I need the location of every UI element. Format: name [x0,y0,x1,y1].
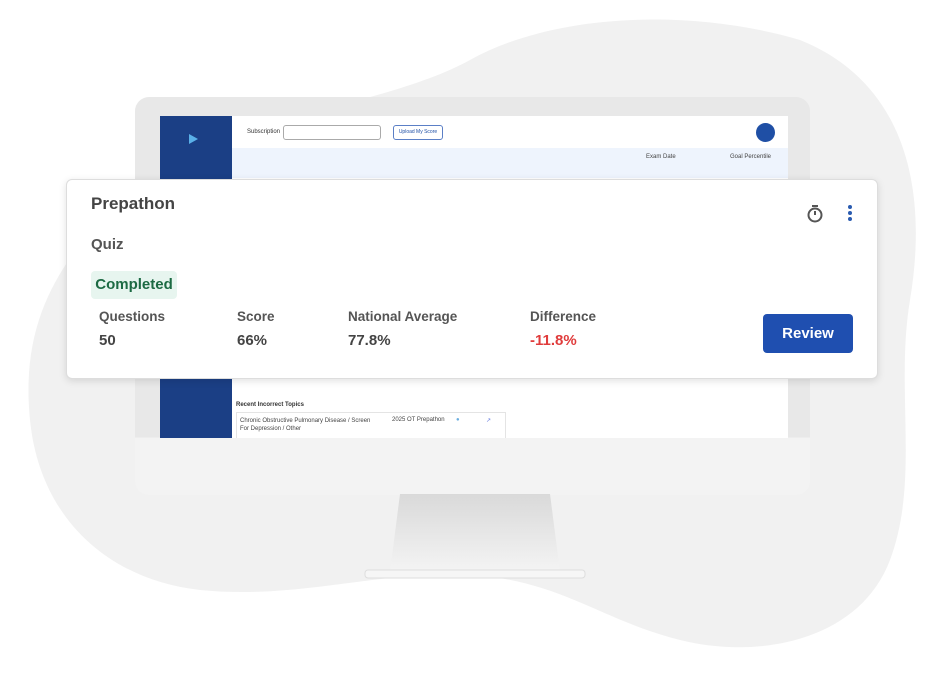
review button [763,314,853,353]
recent incorrect topics: ↗ [486,418,491,424]
card: Prepathon quiz [66,179,878,379]
header strip: Exam Date [646,154,676,160]
recent incorrect topics: 2025 OT Prepathon [392,417,445,423]
title: Prepathon [91,194,175,213]
stat: national average: National Average [348,309,457,324]
status badge: Completed [95,276,173,293]
stat: questions: Questions [99,309,165,324]
review button: Review [782,325,834,342]
stat: difference [530,309,596,349]
header strip [232,148,788,178]
subtitle: Quiz [91,236,124,253]
recent incorrect topics: ● [456,417,460,423]
icon: more menu [848,205,852,221]
sidebar [160,116,232,438]
stat: difference: Difference [530,309,596,324]
stat: score: 66% [237,332,267,349]
screen [160,116,788,438]
stat: national average: 77.8% [348,332,391,349]
recent incorrect topics: Chronic Obstructive Pulmonary Disease / Screen For Depression / Other [240,418,370,432]
stat: questions [99,309,165,349]
top bar [247,123,775,142]
monitor stand [364,494,586,578]
status badge [91,271,177,299]
stat: national average [348,309,457,349]
recent incorrect topics: Recent Incorrect Topics [236,402,304,408]
monitor [135,97,810,495]
recent incorrect topics [236,402,506,438]
stat: score: Score [237,309,275,324]
stat: score [237,309,275,349]
top bar: Subscription [247,129,280,135]
icon: timer [808,205,822,222]
stat: difference: -11.8% [530,332,577,349]
stat: questions: 50 [99,332,116,349]
top bar: Upload My Score [399,129,437,135]
header strip: Goal Percentile [730,154,771,160]
